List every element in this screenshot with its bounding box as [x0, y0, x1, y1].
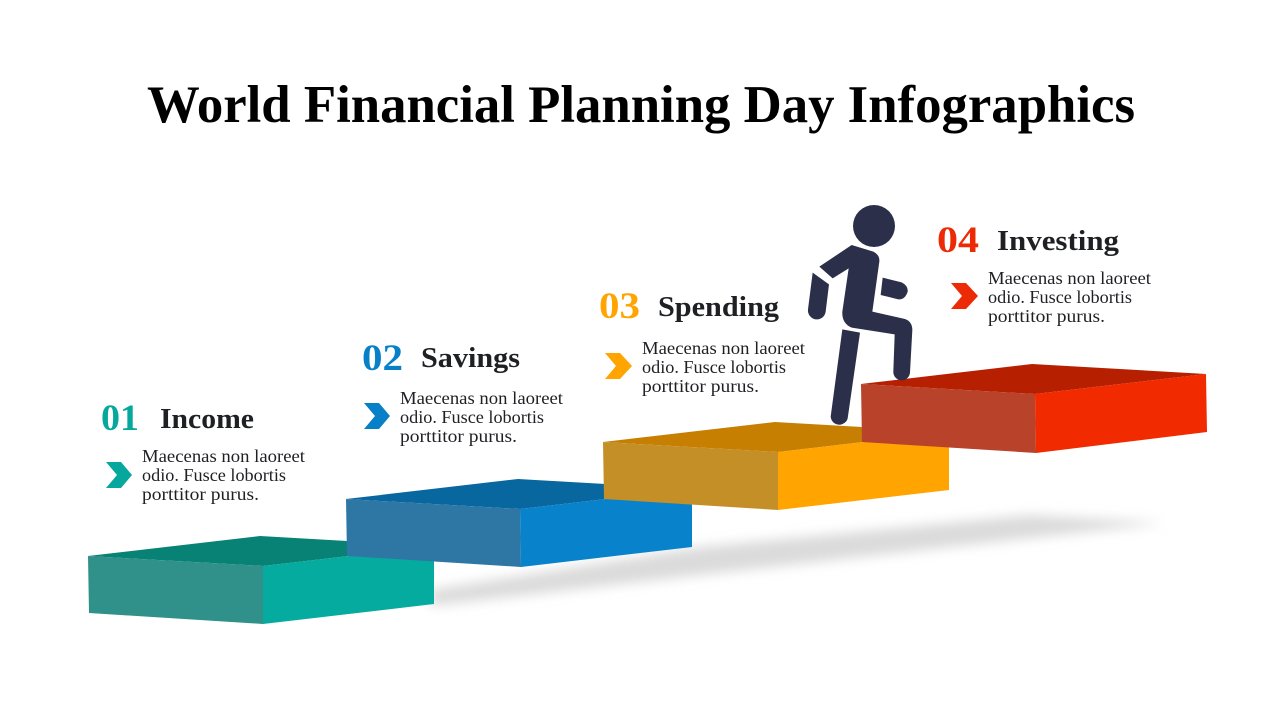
text block: spending description: Maecenas non laoreet: [642, 338, 805, 358]
text block: investing description: odio. Fusce lobortis: [988, 287, 1132, 307]
text block: spending description: odio. Fusce lobortis: [642, 357, 786, 377]
icon: blue chevron: [364, 403, 390, 429]
text block: investing description: porttitor purus.: [988, 306, 1105, 326]
icon: orange chevron: [605, 353, 632, 379]
text block: savings description: odio. Fusce lobortis: [400, 407, 544, 427]
step 4 label: 04 investing: [937, 220, 1151, 326]
icon: teal chevron: [106, 462, 132, 488]
text block: savings description: [400, 388, 563, 446]
step 1 block: income: [88, 536, 434, 624]
text block: income description: porttitor purus.: [142, 484, 259, 504]
heading: savings: Savings: [421, 342, 520, 374]
step 1 label: 01 income: [101, 398, 305, 504]
text block: investing description: [988, 268, 1151, 326]
text block: savings description: porttitor purus.: [400, 426, 517, 446]
number 01: 01: [101, 398, 139, 439]
text block: investing description: Maecenas non laoreet: [988, 268, 1151, 288]
text block: spending description: [642, 338, 805, 396]
step 3 block: spending: [603, 422, 949, 510]
text block: savings description: Maecenas non laoreet: [400, 388, 563, 408]
step 2 label: 02 savings: [362, 338, 563, 446]
step 4 block: investing: [861, 364, 1207, 453]
text block: income description: odio. Fusce lobortis: [142, 465, 286, 485]
step 2 block: savings: [346, 479, 692, 567]
step 3 label: 03 spending: [599, 286, 805, 396]
number 02: 02: [362, 338, 403, 379]
title: World Financial Planning Day Infographics: [147, 76, 1135, 134]
floor shadow: [430, 515, 1165, 606]
icon: red chevron: [951, 283, 978, 309]
heading: spending: Spending: [658, 291, 780, 323]
number 03: 03: [599, 286, 640, 327]
icon: person climbing steps: [808, 205, 912, 425]
heading: investing: Investing: [997, 225, 1120, 257]
heading: income: Income: [160, 403, 254, 435]
text block: spending description: porttitor purus.: [642, 376, 759, 396]
text block: income description: [142, 446, 305, 504]
text block: income description: Maecenas non laoreet: [142, 446, 305, 466]
number 04: 04: [937, 220, 979, 261]
